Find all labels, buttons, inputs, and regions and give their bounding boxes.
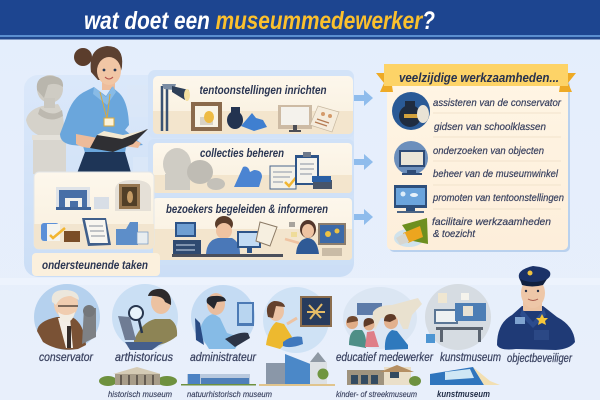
arrow: to list middle: [354, 154, 373, 170]
staff: conservator: conservator: [39, 350, 94, 364]
list dividers: [433, 113, 561, 209]
icon: vase and bust: [392, 92, 430, 130]
icon: document book: [82, 218, 111, 246]
illustration: staff at desk: [172, 216, 283, 257]
museum: kunstmuseum: [430, 367, 500, 399]
icon: document: [310, 106, 339, 132]
icon: display monitor: [278, 105, 312, 132]
icon: framed painting: [115, 180, 151, 211]
panel: tentoonstellingen inrichten: [148, 70, 354, 138]
illustration: guide and wall board: [285, 220, 346, 256]
icon: clipboard: [295, 152, 319, 185]
icon: framed vase: [191, 102, 222, 131]
museum: kinder- of streekmuseum: kinder- of streekmuseum: [336, 390, 417, 399]
label: ondersteunende taken: ondersteunende taken: [42, 258, 148, 272]
icon: museum building: [56, 187, 109, 210]
backdrop wall frames: [127, 85, 151, 172]
text: bezoekers begeleiden & informeren: bezoekers begeleiden & informeren: [166, 202, 328, 216]
icon: archive files: [116, 222, 148, 245]
museum: historisch museum: historisch museum: [108, 390, 172, 399]
staff: educatief medewerker: [336, 287, 434, 364]
icon: stapler box: [312, 176, 332, 189]
text: gidsen: gidsen van schoolklassen: [434, 121, 546, 133]
museum: natuurhistorisch museum: [181, 374, 272, 399]
title: wat doet een museummedewerker?: [84, 7, 435, 35]
panel: collecties beheren: [148, 139, 354, 197]
band behind staff row: [0, 278, 600, 285]
text: facilitaire: facilitaire werkzaamheden: [432, 216, 551, 228]
museum: kunstmuseum: kunstmuseum: [437, 389, 490, 399]
staff: kunstmuseum workplace: kunstmuseum: [440, 350, 501, 364]
text: promoten: promoten van tentoonstellingen: [432, 192, 564, 204]
icon: black vase: [227, 111, 243, 129]
panel: veelzijdige werkzaamheden: [376, 64, 576, 252]
icon: desktop round: [394, 141, 428, 175]
icon: kiosk: [173, 222, 201, 255]
banner: [376, 64, 576, 92]
text: assisteren: assisteren van de conservator: [433, 97, 561, 109]
arrow: to list top: [354, 90, 373, 106]
staff: educatief medewerker: educatief medewerker: [336, 350, 434, 364]
banner: veelzijdige werkzaamheden...: [399, 70, 559, 85]
icon: check card: [41, 223, 80, 242]
text: beheer: beheer van de museumwinkel: [433, 168, 559, 180]
icon: monitor: [394, 185, 427, 213]
icon: blue gloves: [241, 113, 267, 131]
icon: form with check: [270, 166, 298, 189]
icon: vase neck: [231, 107, 240, 114]
icon: blue gloves: [234, 167, 262, 187]
museum: historisch museum: [99, 367, 177, 399]
staff: administrateur: administrateur: [190, 350, 257, 364]
icon: megaphone: [394, 218, 428, 247]
staff: guide with painting: [263, 287, 332, 353]
header band: [0, 0, 600, 40]
staff: conservator: [34, 284, 100, 364]
illustration: museum worker: [60, 46, 148, 176]
staff: arthistoricus: arthistoricus: [115, 350, 173, 364]
staff: kunstmuseum workplace: [425, 284, 501, 364]
icon: marble head: [163, 148, 225, 190]
illustration: bust on pedestal: [26, 75, 68, 174]
label: ondersteunende taken: [32, 253, 160, 276]
text: collecties beheren: collecties beheren: [200, 146, 284, 160]
museum: blue modern building: [259, 352, 335, 386]
panel: main backdrop: [24, 75, 354, 277]
staff: arthistoricus: [112, 284, 178, 364]
staff: objectbeveiliger: [497, 266, 575, 365]
arrow: to list bottom: [354, 209, 373, 225]
text: toezicht: & toezicht: [433, 228, 476, 240]
staff: administrateur: [190, 285, 257, 364]
staff: objectbeveiliger: objectbeveiliger: [507, 351, 573, 365]
text: tentoonstellingen inrichten: tentoonstellingen inrichten: [200, 83, 326, 97]
panel: bezoekers begeleiden & informeren: [148, 197, 354, 265]
icon: spotlight: [162, 84, 190, 131]
text: onderzoeken: onderzoeken van objecten: [433, 145, 544, 157]
panel: left support card: [34, 172, 154, 249]
museum: natuurhistorisch museum: natuurhistorisch museum: [187, 390, 272, 399]
museum: kinder- of streekmuseum: [336, 365, 421, 399]
